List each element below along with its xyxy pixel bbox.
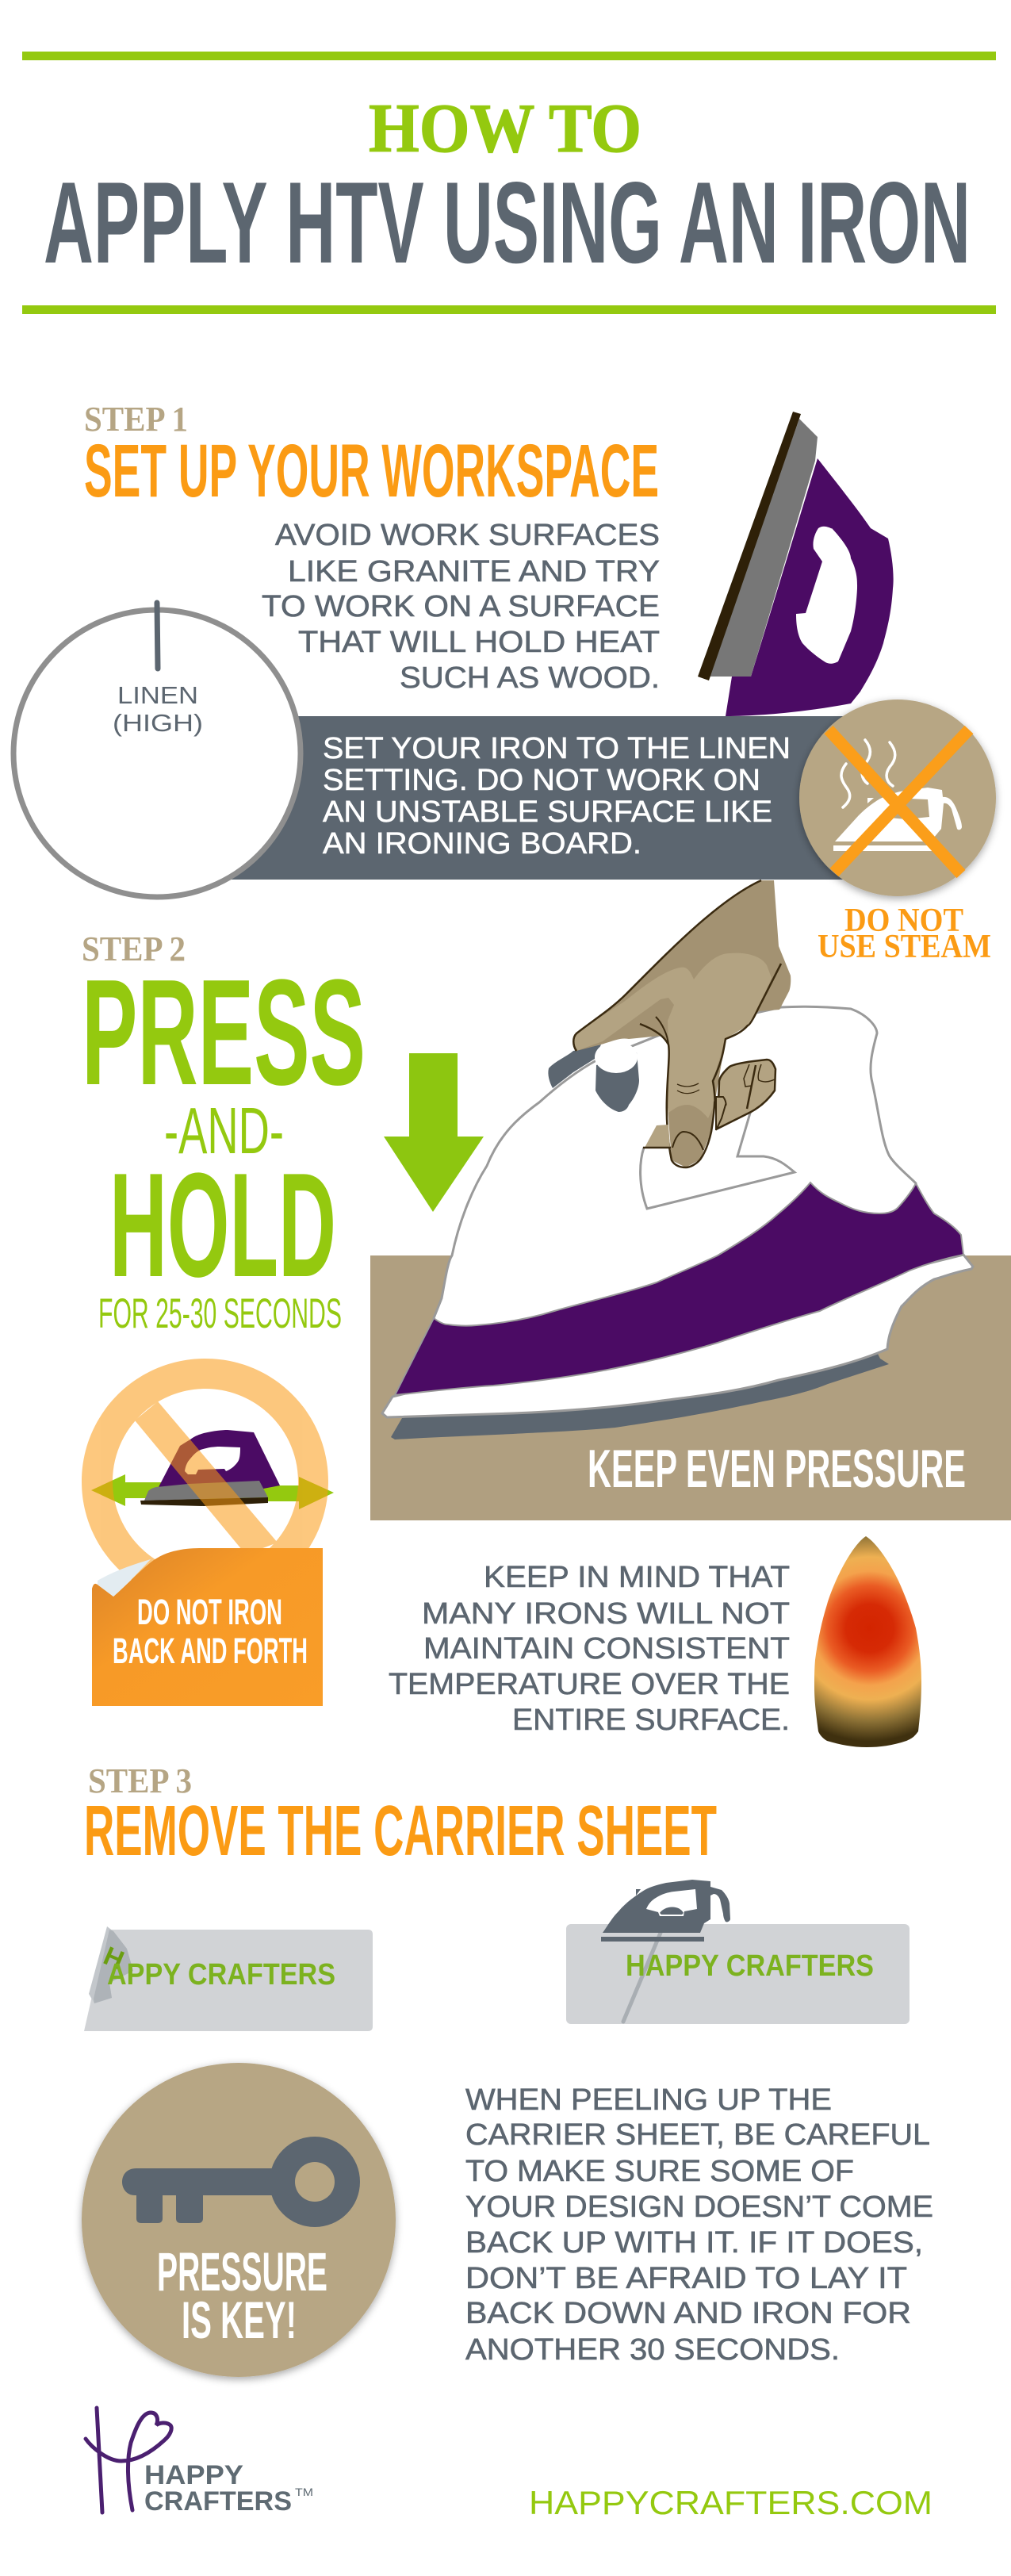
arrow: down <box>384 1053 484 1212</box>
logo: happy crafters <box>86 2408 313 2517</box>
top rule <box>22 52 996 60</box>
workspace text block: TO WORK ON A SURFACE <box>262 590 660 623</box>
icon: do not iron back and forth <box>82 1359 334 1604</box>
website url: HAPPYCRAFTERS.COM <box>529 2484 932 2521</box>
panel: carrier sheet with iron: HAPPY CRAFTERS <box>626 1949 874 1983</box>
heading: hold: HOLD <box>109 1142 336 1308</box>
dial: linen high <box>13 603 301 897</box>
banner: iron setting <box>230 716 856 880</box>
dial: linen high: LINEN <box>117 681 198 709</box>
icon: upright iron <box>698 412 894 716</box>
banner text: AN UNSTABLE SURFACE LIKE <box>323 795 772 829</box>
callout: do not iron back and forth: DO NOT IRON <box>137 1592 282 1632</box>
temperature text block: TEMPERATURE OVER THE <box>389 1668 790 1701</box>
illustration: hand pressing iron <box>382 880 973 1439</box>
icon: key <box>122 2137 360 2227</box>
carrier sheet text block: YOUR DESIGN DOESN’T COME <box>465 2191 933 2224</box>
banner text: SET YOUR IRON TO THE LINEN <box>323 732 791 765</box>
heading: and: -AND- <box>164 1094 284 1167</box>
temperature text block <box>389 1561 790 1737</box>
heading: press: PRESS <box>82 949 366 1117</box>
callout: do not iron back and forth: BACK AND FORTH <box>113 1631 308 1671</box>
dial: linen high: (HIGH) <box>113 709 203 737</box>
temperature text block: KEEP IN MIND THAT <box>484 1561 790 1594</box>
panel: carrier sheet peeled: H <box>100 1941 128 1975</box>
panel: carrier sheet peeled <box>84 1926 373 2031</box>
duration caption: FOR 25-30 SECONDS <box>98 1290 342 1337</box>
panel: carrier sheet with iron <box>566 1880 910 2024</box>
step 3 label: STEP 3 <box>88 1761 192 1800</box>
step 3 section <box>82 1761 933 2377</box>
temperature text block: MAINTAIN CONSISTENT <box>423 1632 790 1666</box>
icon: iron soleplate heat map <box>814 1536 921 1747</box>
panel: carrier sheet peeled: APPY CRAFTERS <box>107 1958 335 1991</box>
carrier sheet text block: WHEN PEELING UP THE <box>465 2083 832 2117</box>
workspace text block: LIKE GRANITE AND TRY <box>288 555 660 588</box>
step 2 section <box>82 880 1011 1747</box>
workspace text block: AVOID WORK SURFACES <box>275 519 660 552</box>
temperature text block: MANY IRONS WILL NOT <box>422 1597 790 1631</box>
do not use steam caption: USE STEAM <box>818 929 991 965</box>
bottom header rule <box>22 305 996 314</box>
carrier sheet text block: BACK DOWN AND IRON FOR <box>465 2297 911 2330</box>
banner text <box>323 732 791 861</box>
step 2 label: STEP 2 <box>82 930 186 968</box>
badge: pressure is key: IS KEY! <box>182 2290 297 2349</box>
workspace text block <box>262 519 660 695</box>
title: how to: HOW TO <box>369 90 641 167</box>
callout: do not iron back and forth <box>92 1548 323 1706</box>
banner text: AN IRONING BOARD. <box>323 827 641 861</box>
temperature text block: ENTIRE SURFACE. <box>512 1704 790 1737</box>
panel: work surface <box>370 1255 1011 1520</box>
carrier sheet text block <box>465 2083 933 2367</box>
carrier sheet text block: TO MAKE SURE SOME OF <box>465 2155 854 2188</box>
step 1 label: STEP 1 <box>84 400 188 439</box>
badge: pressure is key: PRESSURE <box>157 2241 327 2302</box>
step 1 section <box>13 400 996 965</box>
workspace text block: THAT WILL HOLD HEAT <box>298 626 660 659</box>
icon: no steam <box>799 700 996 896</box>
do not use steam caption: DO NOT <box>844 903 963 939</box>
carrier sheet text block: CARRIER SHEET, BE CAREFUL <box>465 2118 930 2152</box>
carrier sheet text block: DON’T BE AFRAID TO LAY IT <box>465 2262 907 2295</box>
logo: happy crafters: CRAFTERS <box>144 2486 292 2517</box>
carrier sheet text block: ANOTHER 30 SECONDS. <box>465 2333 840 2367</box>
workspace text block: SUCH AS WOOD. <box>400 661 660 695</box>
badge: pressure is key <box>82 2063 396 2377</box>
logo: happy crafters: TM <box>295 2486 313 2498</box>
logo: happy crafters: HAPPY <box>144 2460 243 2490</box>
do not use steam caption <box>818 903 991 965</box>
banner text: SETTING. DO NOT WORK ON <box>323 764 760 797</box>
icon: small iron <box>601 1880 730 1942</box>
carrier sheet text block: BACK UP WITH IT. IF IT DOES, <box>465 2226 923 2260</box>
